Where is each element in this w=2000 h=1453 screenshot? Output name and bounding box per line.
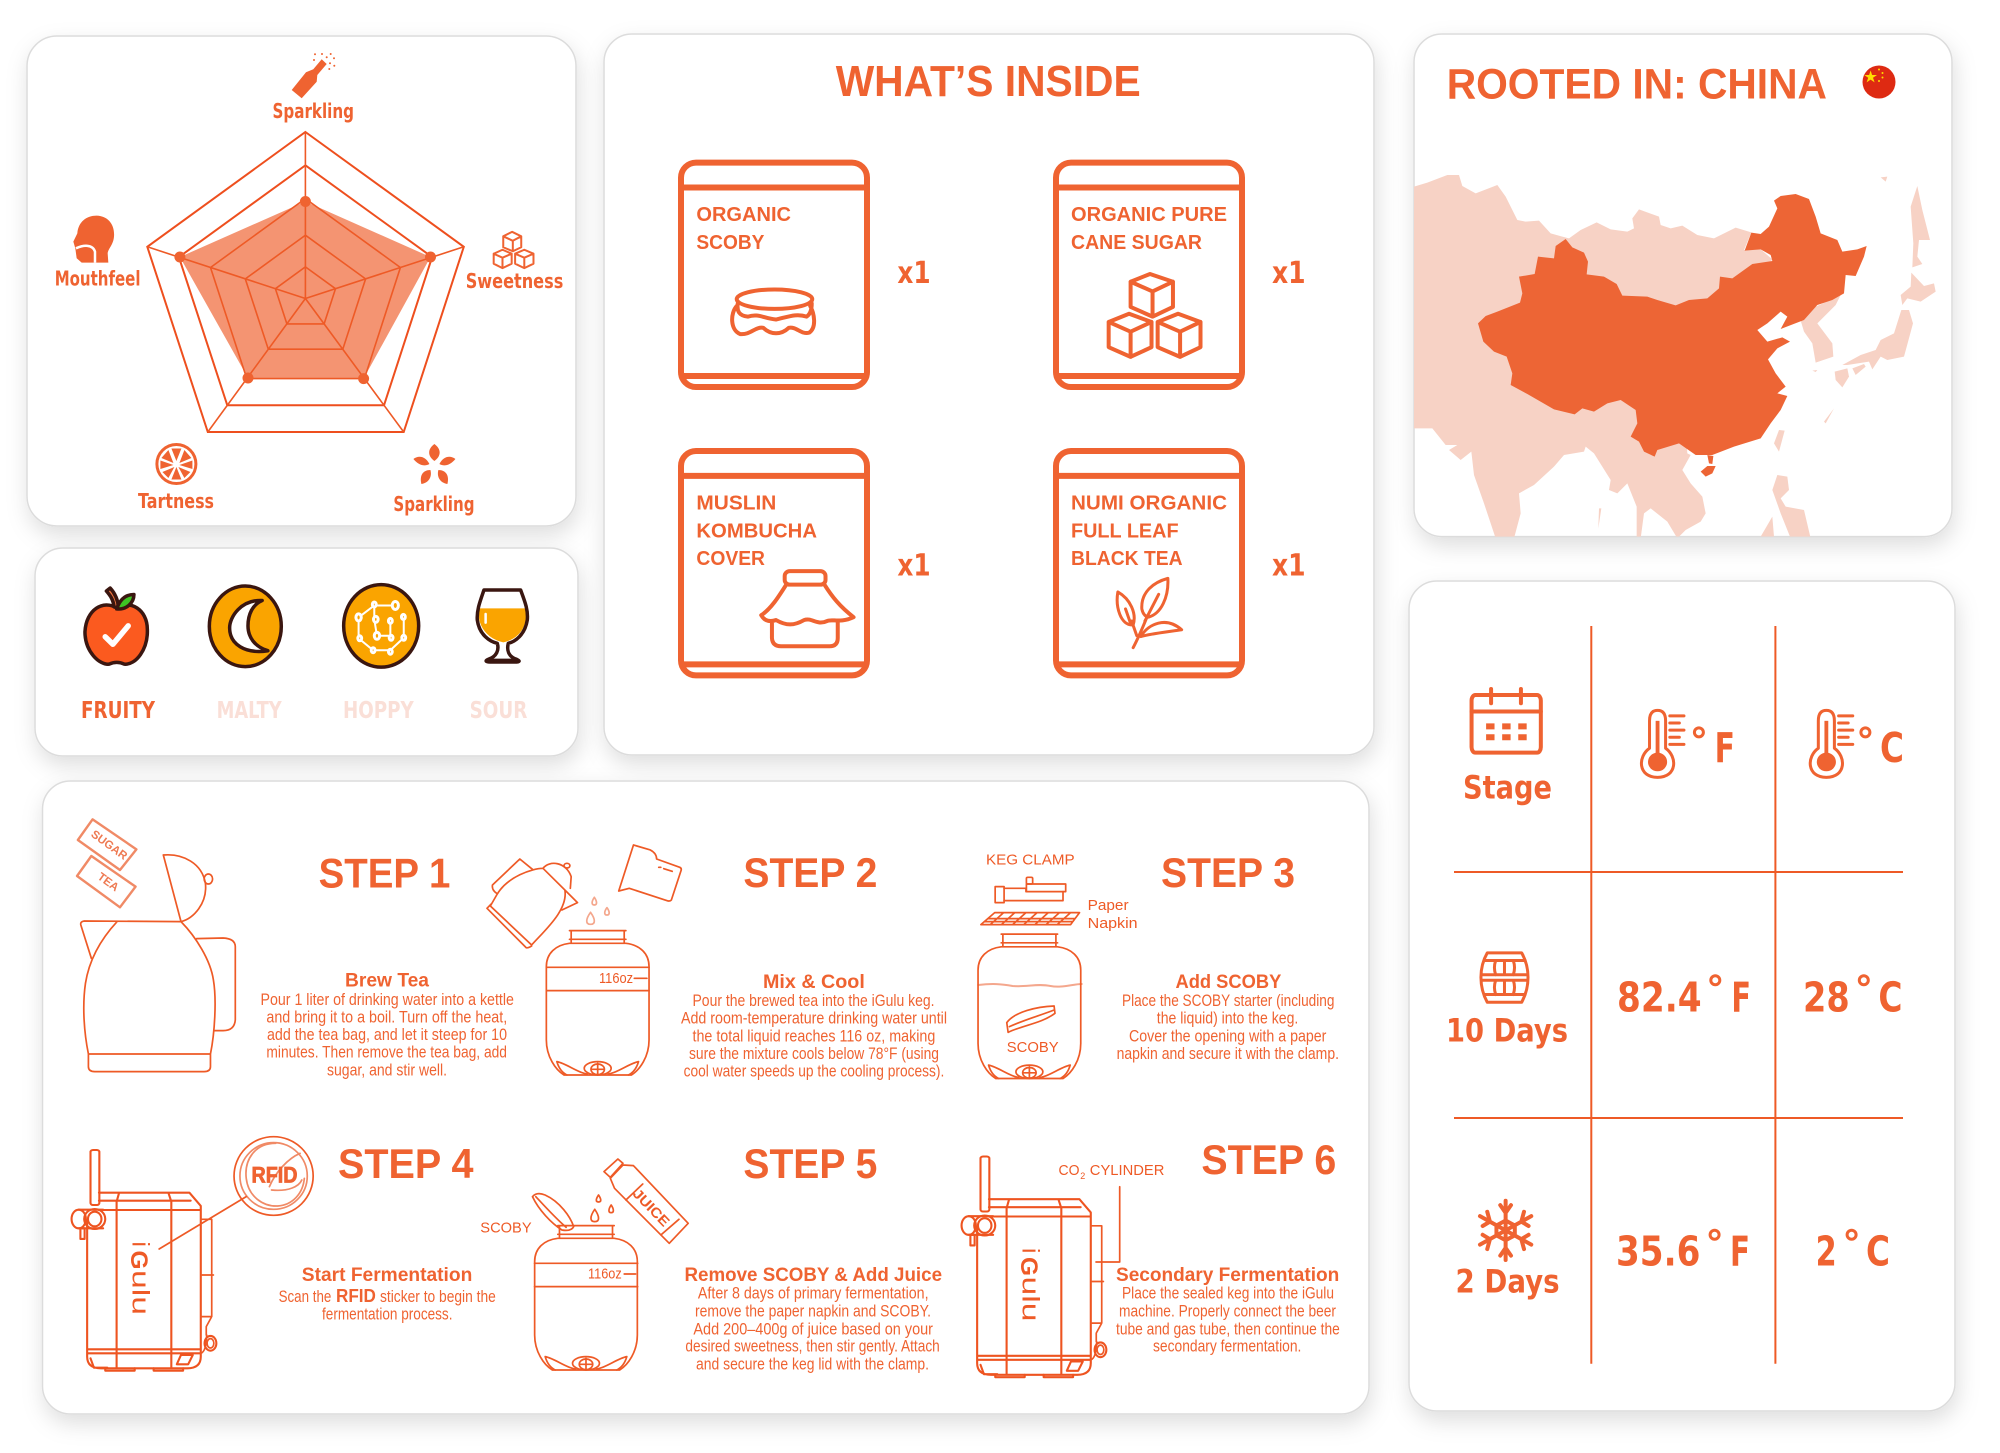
title: WHAT’S INSIDE — [836, 57, 1141, 106]
step 1: SUGAR — [88, 829, 130, 863]
icon: flower — [413, 444, 455, 484]
map: china and neighbours — [1414, 175, 1936, 538]
header: stage — [1463, 689, 1552, 807]
step 6: Secondary Fermentation — [1116, 1265, 1339, 1286]
step 5: After 8 days of primary fermentation, — [698, 1285, 929, 1303]
card: organic scoby — [681, 163, 931, 387]
card: muslin cover: KOMBUCHA — [696, 521, 817, 543]
icon: sparkling bottle — [292, 53, 335, 98]
step 6: secondary fermentation. — [1153, 1338, 1301, 1356]
card: organic scoby: SCOBY — [696, 232, 765, 254]
step 1: sugar, and stir well. — [327, 1061, 447, 1079]
row: 10 days fahrenheit: 82.4 — [1617, 974, 1702, 1022]
step 5: JUICE — [630, 1185, 673, 1230]
step 1: Brew Tea — [345, 971, 429, 992]
card: organic cane sugar: ORGANIC PURE — [1071, 204, 1227, 226]
step 6 — [962, 1136, 1340, 1377]
header: celsius — [1810, 710, 1904, 777]
row: 10 days celsius — [1803, 974, 1902, 1022]
label: fruity: FRUITY — [81, 698, 155, 724]
step 4: RFID — [252, 1163, 298, 1188]
step 3: Paper — [1088, 897, 1129, 914]
card: muslin cover: MUSLIN — [696, 493, 776, 515]
step 3: the liquid) into the keg. — [1157, 1010, 1298, 1028]
step 4 — [72, 1137, 496, 1371]
row: 10 days: 10 Days — [1446, 1012, 1568, 1050]
step 1: TEA — [95, 871, 121, 894]
step 4: sticker to begin the — [380, 1288, 496, 1306]
step 1: and bring it to a boil. Turn off the heat, — [266, 1008, 507, 1026]
label: hoppy: HOPPY — [343, 698, 414, 724]
header: celsius: C — [1880, 724, 1904, 772]
step 2: sure the mixture cools below 78°F (using — [689, 1045, 939, 1063]
logo: iGulu: ulu — [126, 1270, 153, 1315]
step 5: Add 200–400g of juice based on your — [693, 1320, 933, 1338]
card: black tea: BLACK TEA — [1071, 548, 1183, 570]
step 3: napkin and secure it with the clamp. — [1117, 1045, 1339, 1063]
step 5: desired sweetness, then stir gently. Attach — [685, 1338, 940, 1356]
step 5: STEP 5 — [743, 1140, 877, 1187]
icon: hoppy — [344, 585, 419, 667]
table grid — [1454, 626, 1903, 1364]
step 3: Cover the opening with a paper — [1129, 1028, 1327, 1046]
card: organic cane sugar — [1056, 163, 1306, 387]
icon: china flag — [1862, 66, 1896, 98]
step 5: remove the paper napkin and SCOBY. — [695, 1303, 931, 1321]
row: 2 days — [1456, 1201, 1560, 1300]
step 4: fermentation process. — [322, 1305, 452, 1323]
step 3: Add SCOBY — [1176, 972, 1282, 993]
step 6: 2 — [1080, 1171, 1085, 1181]
logo: iGulu machine: i — [1016, 1248, 1043, 1253]
step 4: STEP 4 — [338, 1140, 474, 1187]
illustration: igulu machine and rfid — [72, 1137, 313, 1371]
card: organic scoby: x1 — [897, 256, 931, 291]
step 1: minutes. Then remove the tea bag, add — [266, 1044, 507, 1062]
header: fahrenheit: F — [1715, 724, 1735, 772]
panel: rooted in china — [1414, 34, 1952, 538]
step 3 — [978, 849, 1339, 1078]
step 3: KEG CLAMP — [986, 851, 1075, 868]
step 5: Remove SCOBY & Add Juice — [684, 1265, 942, 1286]
label: mouthfeel: Mouthfeel — [55, 267, 141, 291]
step 6: Place the sealed keg into the iGulu — [1122, 1285, 1334, 1303]
logo: iGulu: G — [125, 1250, 152, 1270]
step 1 — [77, 819, 514, 1079]
icon: malty moon — [209, 586, 281, 667]
label: sour: SOUR — [470, 698, 528, 724]
step 3: Napkin — [1088, 915, 1138, 932]
label: tartness: Tartness — [138, 489, 214, 513]
step 2: 116oz — [599, 970, 633, 987]
step 1: Pour 1 liter of drinking water into a kettle — [260, 991, 514, 1009]
step 2: Add room-temperature drinking water until — [681, 1010, 947, 1028]
step 4: Scan the — [279, 1288, 331, 1306]
illustration: keg with scoby and juice — [532, 1159, 688, 1287]
icon: sour glass — [477, 590, 527, 662]
illustration: kettle and packets — [77, 819, 235, 1072]
step 5: and secure the keg lid with the clamp. — [696, 1355, 929, 1373]
step 2: cool water speeds up the cooling process). — [684, 1063, 944, 1081]
step 6: CO — [1058, 1162, 1080, 1179]
logo: iGulu — [125, 1242, 153, 1315]
illustration: pour into keg — [487, 845, 681, 1075]
header: stage: Stage — [1463, 769, 1552, 807]
step 6: tube and gas tube, then continue the — [1116, 1320, 1340, 1338]
icon: orange slice — [157, 444, 196, 484]
panel: flavour radar — [27, 36, 576, 526]
step 3: SCOBY — [1007, 1039, 1059, 1056]
step 5: 116oz — [588, 1265, 622, 1282]
row: 2 days celsius: C — [1866, 1228, 1890, 1276]
card: black tea: NUMI ORGANIC — [1071, 493, 1227, 515]
illustration: clamp, napkin, keg with scoby — [978, 877, 1082, 1032]
card: organic scoby: ORGANIC — [696, 204, 791, 226]
logo: iGulu: i — [126, 1242, 153, 1247]
card: muslin cover: x1 — [897, 548, 931, 584]
label: sparkling lower: Sparkling — [393, 492, 474, 516]
card: muslin cover — [681, 451, 931, 675]
step 2 — [487, 845, 947, 1081]
row: 10 days — [1446, 953, 1568, 1050]
card: black tea — [1056, 451, 1306, 675]
step 3: Place the SCOBY starter (including — [1122, 992, 1334, 1010]
step 1: STEP 1 — [319, 849, 450, 896]
step 6: machine. Properly connect the beer — [1119, 1303, 1336, 1321]
step 4: Start Fermentation — [302, 1265, 472, 1286]
radar chart — [147, 132, 464, 432]
row: 10 days celsius: C — [1878, 974, 1902, 1022]
row: 10 days celsius: 28 — [1803, 974, 1850, 1022]
step 6: CYLINDER — [1090, 1162, 1165, 1179]
logo: iGulu machine: G — [1015, 1257, 1042, 1276]
step 4: RFID — [336, 1286, 376, 1306]
step 5 — [480, 1140, 942, 1373]
label: malty: MALTY — [217, 698, 282, 724]
label: sweetness: Sweetness — [466, 269, 563, 293]
label: sparkling: Sparkling — [272, 99, 354, 123]
step 1: add the tea bag, and let it steep for 10 — [267, 1026, 507, 1044]
step 6: STEP 6 — [1201, 1136, 1336, 1183]
panel: what's inside — [604, 34, 1374, 755]
card: organic cane sugar: x1 — [1272, 256, 1306, 291]
logo: iGulu machine: ulu — [1016, 1276, 1043, 1322]
logo: iGulu machine — [1015, 1248, 1043, 1322]
row: 2 days fahrenheit: F — [1730, 1228, 1750, 1276]
panel: brewing steps — [42, 781, 1369, 1414]
icon: head — [73, 216, 114, 263]
row: 2 days celsius: 2 — [1816, 1228, 1837, 1276]
step 2: STEP 2 — [743, 849, 877, 896]
step 2: Mix & Cool — [763, 972, 865, 993]
step 2: Pour the brewed tea into the iGulu keg. — [692, 992, 934, 1010]
step 5: SCOBY — [480, 1219, 532, 1236]
icon: apple — [85, 588, 147, 664]
step 2: the total liquid reaches 116 oz, making — [692, 1028, 935, 1046]
title: ROOTED IN: CHINA — [1447, 60, 1827, 108]
row: 2 days: 2 Days — [1456, 1262, 1560, 1300]
card: black tea: x1 — [1272, 548, 1306, 584]
header: fahrenheit — [1641, 710, 1735, 777]
row: 2 days celsius — [1816, 1228, 1890, 1276]
row: 2 days fahrenheit: 35.6 — [1616, 1228, 1700, 1276]
icon: sugar cubes — [494, 232, 533, 268]
row: 10 days fahrenheit: F — [1731, 974, 1751, 1022]
illustration: machine with co2 cylinder — [962, 1156, 1106, 1377]
panel: fermentation table — [1409, 581, 1955, 1411]
card: muslin cover: COVER — [696, 548, 766, 570]
card: organic cane sugar: CANE SUGAR — [1071, 232, 1203, 254]
step 3: STEP 3 — [1161, 849, 1295, 896]
panel: flavour profile — [35, 548, 578, 756]
card: black tea: FULL LEAF — [1071, 521, 1179, 543]
